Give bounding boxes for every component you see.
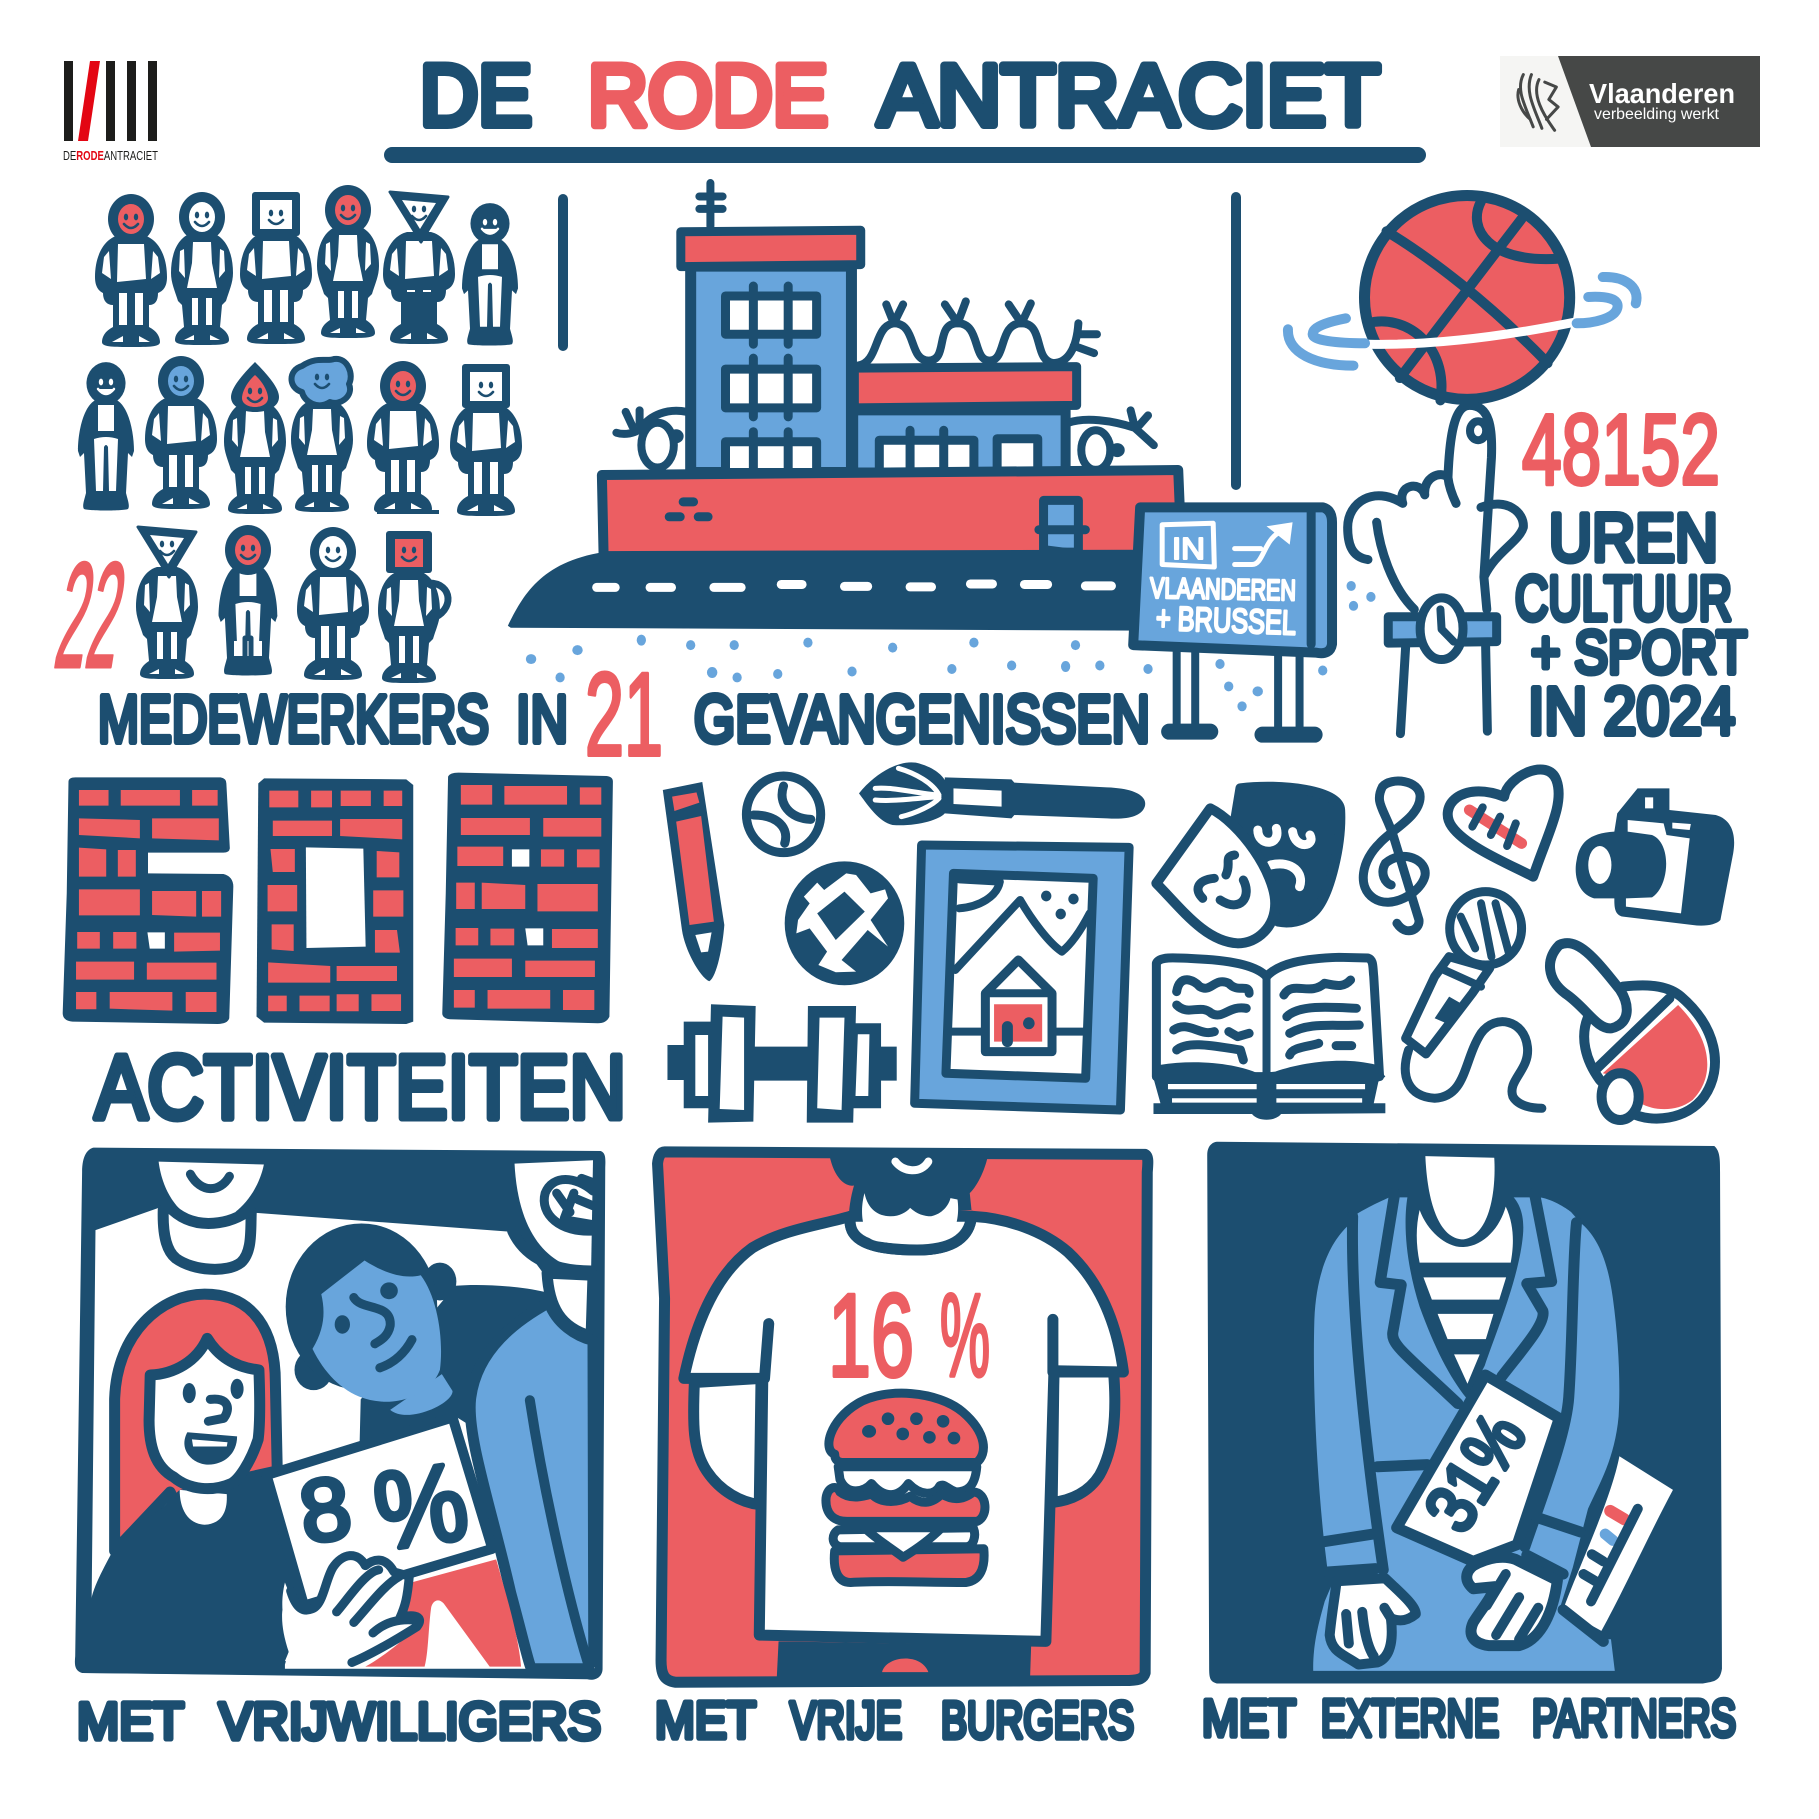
caption: met externe partners: EXTERNE [1321, 1690, 1499, 1748]
house [985, 960, 1052, 1052]
road sign: in Vlaanderen + Brussel: IN [1172, 531, 1205, 566]
text: 22 [47, 531, 136, 699]
blue dots [526, 581, 1376, 711]
stat: 48152 uren cultuur + sport in 2024: 48152 [1522, 394, 1720, 506]
sign posts [1177, 652, 1300, 731]
frame [1207, 1142, 1722, 1683]
caption: medewerkers in 21 gevangenissen: GEVANGENISSEN [694, 682, 1150, 757]
caption: met vrije burgers: BURGERS [941, 1692, 1134, 1750]
icon: treble clef [1363, 781, 1425, 931]
title underline [392, 147, 1418, 163]
top centre person [159, 1162, 264, 1269]
panel: met vrije burgers 16%: 16 [828, 1270, 914, 1402]
trousers [777, 1641, 1031, 1677]
mountains [955, 900, 1090, 970]
icon: dumbbell [667, 1004, 897, 1123]
icon: microphone [1405, 892, 1542, 1108]
divider right [1231, 197, 1241, 485]
logo: De Rode Antraciet: DERODEANTRACIET [63, 148, 158, 163]
caption: met vrije burgers [655, 1692, 1134, 1750]
cuffs [1324, 1517, 1580, 1574]
person 5 [383, 192, 455, 344]
t-shirt [684, 1216, 1123, 1641]
arrow [1235, 531, 1281, 565]
left hand [1330, 1578, 1416, 1665]
striped shirt [1406, 1181, 1523, 1399]
person 3 [240, 192, 312, 344]
horizon [951, 1028, 1084, 1036]
antenna [699, 183, 723, 226]
digit 5 [63, 777, 233, 1024]
person 1 [95, 194, 167, 347]
panel: met vrijwilligers 8%: % [367, 1439, 475, 1574]
person 12 [450, 364, 522, 516]
jacket [1313, 1197, 1619, 1671]
caption: met vrijwilligers: MET [77, 1693, 184, 1751]
person 13 [136, 527, 198, 679]
icon: paint roller [1550, 943, 1715, 1120]
sheet of paper [267, 1417, 492, 1606]
IN box [1162, 523, 1214, 567]
illustration: basketball on finger [1288, 195, 1637, 734]
basketball [1364, 195, 1570, 399]
person 16 [378, 531, 448, 683]
caption: met externe partners: MET [1202, 1690, 1296, 1748]
low building [853, 410, 1066, 473]
tower [691, 266, 851, 473]
burger [826, 1393, 985, 1582]
moon [959, 879, 1000, 908]
caption: met vrije burgers: VRIJE [790, 1692, 902, 1750]
illustration: prison ship [508, 183, 1376, 711]
arm [1400, 647, 1487, 734]
panel: met vrijwilligers 8%: 8 [294, 1457, 357, 1562]
person 9 [224, 362, 286, 514]
watch [1388, 617, 1497, 643]
caption: met externe partners [1202, 1690, 1736, 1748]
brick digits: 508: 508 [300, 952, 317, 963]
divider left [558, 199, 568, 346]
bricks on hull [669, 502, 708, 517]
stat: 48152 uren cultuur + sport in 2024: CULTUUR [1515, 564, 1732, 634]
icon: camera [1576, 788, 1734, 926]
hand [1348, 405, 1523, 609]
logo: De Rode Antraciet [63, 61, 158, 163]
employees: 22 figures [78, 185, 522, 683]
person 8 [145, 356, 217, 509]
road sign: in Vlaanderen + Brussel: VLAANDEREN [1150, 573, 1296, 607]
orbit swoosh [1368, 322, 1577, 344]
caption: medewerkers in 21 gevangenissen: IN [516, 682, 568, 757]
digit 8 [442, 773, 613, 1023]
icon: open book [1153, 957, 1385, 1120]
chart paper [1563, 1456, 1673, 1641]
person 7 [78, 362, 134, 510]
road sign: in Vlaanderen + Brussel: + BRUSSEL [1155, 600, 1297, 642]
icon: heart with stitches [1448, 769, 1559, 877]
road sign: in Vlaanderen + Brussel [1133, 507, 1332, 735]
stat: 48152 uren cultuur + sport in 2024: + SPORT [1531, 619, 1747, 686]
stat: 48152 uren cultuur + sport in 2024: IN 2024 [1528, 674, 1735, 749]
red trousers [365, 1559, 521, 1667]
person 6 [462, 203, 518, 346]
title: DE [420, 48, 532, 144]
icon: football [785, 861, 904, 985]
red haired woman [82, 1294, 296, 1675]
panel: met externe partners 31%: 31% [1410, 1400, 1540, 1545]
panel: met externe partners 31% [1207, 1142, 1722, 1683]
stat: 48152 uren cultuur + sport in 2024 [1515, 394, 1747, 749]
icon: framed painting [915, 845, 1129, 1110]
title: RODE [588, 48, 828, 144]
person 11 [367, 361, 439, 514]
icon: paint brush [859, 762, 1145, 825]
caption: medewerkers in 21 gevangenissen [98, 649, 1150, 781]
frame [658, 1152, 1148, 1682]
hand [282, 1555, 421, 1661]
caption: met vrijwilligers: VRIJWILLIGERS [219, 1693, 601, 1751]
hull [602, 470, 1182, 556]
road dashes [597, 584, 1111, 587]
lapels and seams [1352, 1193, 1577, 1570]
caption: medewerkers in 21 gevangenissen: MEDEWERKERS [98, 682, 489, 757]
panel: met vrije burgers 16%: % [940, 1270, 990, 1402]
digit 0 [257, 778, 413, 1024]
road deck [508, 551, 1149, 631]
stat: 48152 uren cultuur + sport in 2024: UREN [1549, 500, 1718, 576]
person 4 [317, 185, 379, 338]
beard and neck [829, 1155, 988, 1250]
top right person [513, 1160, 593, 1336]
icon: tennis ball [746, 776, 821, 853]
heading: activiteiten: ACTIVITEITEN [95, 1038, 626, 1138]
panel: met vrije burgers 16% [658, 1152, 1148, 1682]
logo: Vlaanderen verbeelding werkt: Vlaanderen [1589, 78, 1735, 109]
icon: theatre masks [1156, 787, 1340, 943]
blue person [286, 1223, 594, 1673]
frame [75, 1148, 605, 1680]
person 10 [291, 359, 353, 512]
barbed wire [616, 301, 1154, 470]
panel: met vrijwilligers 8% [75, 1148, 605, 1680]
door [1039, 500, 1085, 560]
caption: met vrije burgers: MET [655, 1692, 756, 1750]
title: ANTRACIET [878, 48, 1380, 144]
brick digits: 508 [63, 773, 613, 1024]
neck [1425, 1156, 1495, 1239]
caption: medewerkers in 21 gevangenissen: 21 [585, 649, 663, 781]
person 14 [219, 525, 277, 676]
person 15 [297, 527, 369, 680]
icon: pencil [663, 782, 724, 981]
sign panel [1133, 507, 1332, 653]
sheet of paper [1397, 1375, 1559, 1561]
logo: Vlaanderen verbeelding werkt [1500, 56, 1760, 147]
title [420, 48, 1380, 144]
arms [694, 1378, 761, 1505]
person 2 [171, 192, 233, 345]
right hand [1467, 1557, 1557, 1646]
logo: Vlaanderen verbeelding werkt: verbeelding werkt [1594, 106, 1720, 123]
caption: met externe partners: PARTNERS [1532, 1690, 1736, 1748]
